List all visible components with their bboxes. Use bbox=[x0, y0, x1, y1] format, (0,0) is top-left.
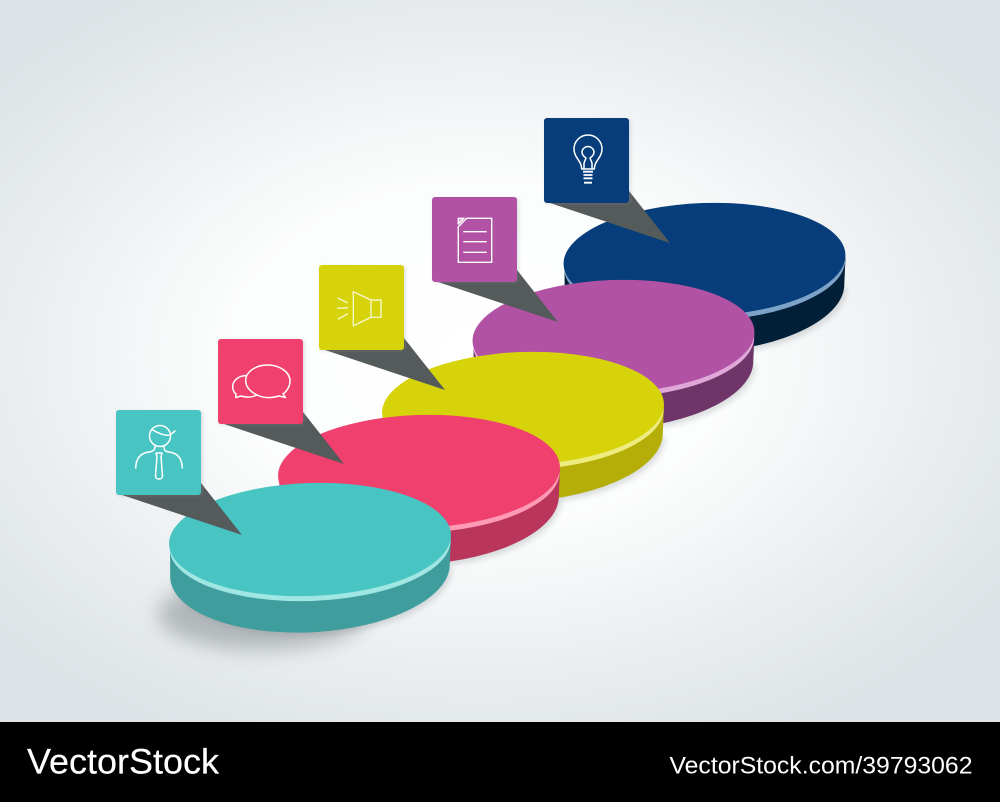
disc: yellow bbox=[380, 347, 666, 502]
shadow: discs on floor bbox=[158, 287, 847, 650]
footer bar bbox=[0, 722, 1000, 802]
disc: teal bbox=[167, 478, 453, 633]
icon: loudspeaker bbox=[338, 292, 381, 326]
card: red chat bbox=[218, 339, 305, 425]
pointer: yellow bbox=[325, 338, 445, 390]
card: purple document bbox=[432, 197, 519, 283]
card: yellow speaker bbox=[319, 265, 406, 351]
card: navy light bulb bbox=[544, 118, 631, 204]
pointer: red bbox=[224, 412, 344, 464]
icon: light bulb bbox=[574, 135, 602, 183]
pointer: teal bbox=[122, 483, 242, 535]
icon: person with tie bbox=[136, 426, 182, 479]
pointer: purple bbox=[438, 270, 558, 322]
pointer: navy bbox=[550, 191, 670, 243]
disc: red bbox=[276, 410, 562, 565]
brand name: VectorStock bbox=[27, 742, 220, 782]
icon: document bbox=[458, 218, 492, 262]
disc: navy bbox=[562, 198, 847, 353]
card: teal person bbox=[116, 410, 203, 496]
icon: speech bubbles bbox=[233, 365, 290, 398]
image id url: VectorStock.com/39793062 bbox=[670, 752, 972, 779]
disc: purple bbox=[471, 275, 756, 430]
